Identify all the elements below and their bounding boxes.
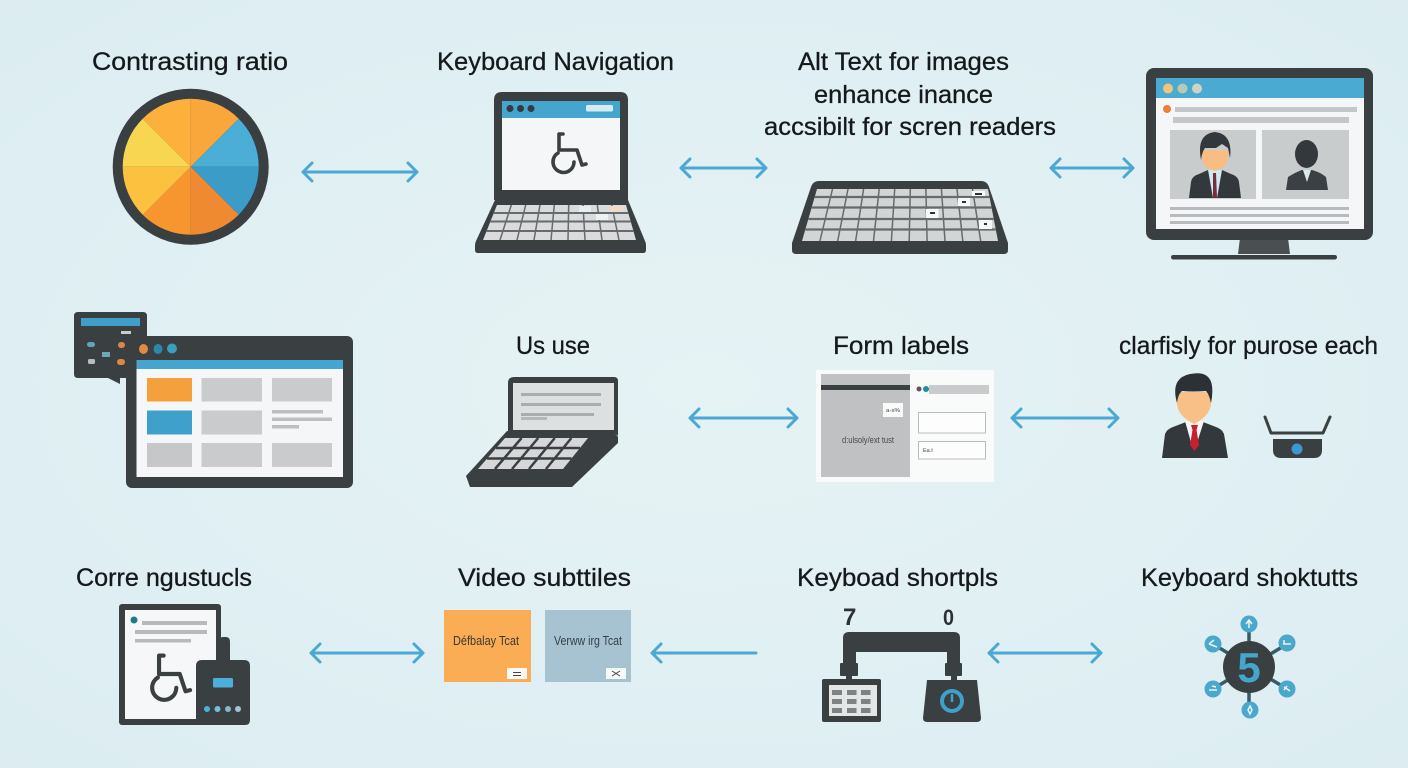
icon: linked keyboard and timer: 0: [943, 605, 954, 630]
text block: Alt Text for images: [764, 48, 1056, 141]
icon: man in suit: [1162, 373, 1228, 458]
icon: tilted laptop: [466, 377, 618, 487]
cards: subtitle samples: [444, 610, 631, 682]
card: orange subtitle: [444, 610, 531, 682]
heading: Us use: Us use: [516, 332, 590, 360]
text block: Alt Text for images: enhance inance: [814, 81, 993, 109]
icon: shortcut hub: [1204, 616, 1296, 718]
arrow: shortcuts to hub: [989, 644, 1101, 662]
arrow: form labels to purpose: [1012, 409, 1118, 427]
icon: laptop with wheelchair symbol: [475, 92, 646, 253]
icon: shortcut hub: 5: [1237, 644, 1261, 691]
heading: clarfisly for purose each: clarfisly for purose each: [1119, 332, 1378, 360]
icon: linked keyboard and timer: 7: [843, 604, 856, 631]
icon: basket with camera: [1265, 417, 1330, 458]
icon: form card: d:ulsoly/ext tust: [842, 435, 894, 445]
heading: Form labels: Form labels: [833, 332, 969, 360]
text block: Alt Text for images: accsibilt for scren readers: [764, 113, 1056, 141]
arrow: contrast to keyboard navigation: [303, 163, 417, 181]
heading: Corre ngustucls: Corre ngustucls: [76, 564, 252, 592]
icon: form card: a-s%: [886, 408, 901, 414]
icon: monitor with two portraits: [1146, 68, 1373, 260]
card: orange subtitle: Défbalay Tcat: [453, 633, 519, 648]
arrow: left pointing to subtitles: [652, 644, 756, 662]
heading: Keyboard Navigation: Keyboard Navigation: [437, 48, 674, 76]
card: slate subtitle: Verww irg Tcat: [554, 633, 622, 648]
icon: wide keyboard: [792, 181, 1008, 254]
heading: Contrasting ratio: Contrasting ratio: [92, 48, 288, 76]
heading: Keyboard shoktutts: Keyboard shoktutts: [1141, 564, 1358, 592]
icon: form card: [816, 370, 994, 482]
icon: document with wheelchair and device: [119, 604, 250, 725]
heading: Video subttiles: Video subttiles: [458, 564, 631, 592]
arrow: document to video subtitles: [311, 644, 423, 662]
heading: Keyboad shortpls: Keyboad shortpls: [797, 564, 998, 592]
card: slate subtitle: [545, 610, 631, 682]
text block: Alt Text for images: Alt Text for images: [798, 48, 1009, 76]
arrow: laptop to form labels: [690, 409, 797, 427]
arrow: keyboard navigation to alt text: [681, 159, 766, 177]
icon: linked keyboard and timer: [822, 604, 981, 722]
app window: [126, 336, 353, 488]
chat bubble: [74, 312, 147, 384]
icon: colour contrast wheel: [113, 89, 269, 245]
icon: chat bubble with app window: [74, 312, 353, 488]
arrow: alt text to monitor: [1051, 159, 1133, 177]
icon: form card: Ea.t: [923, 448, 933, 454]
